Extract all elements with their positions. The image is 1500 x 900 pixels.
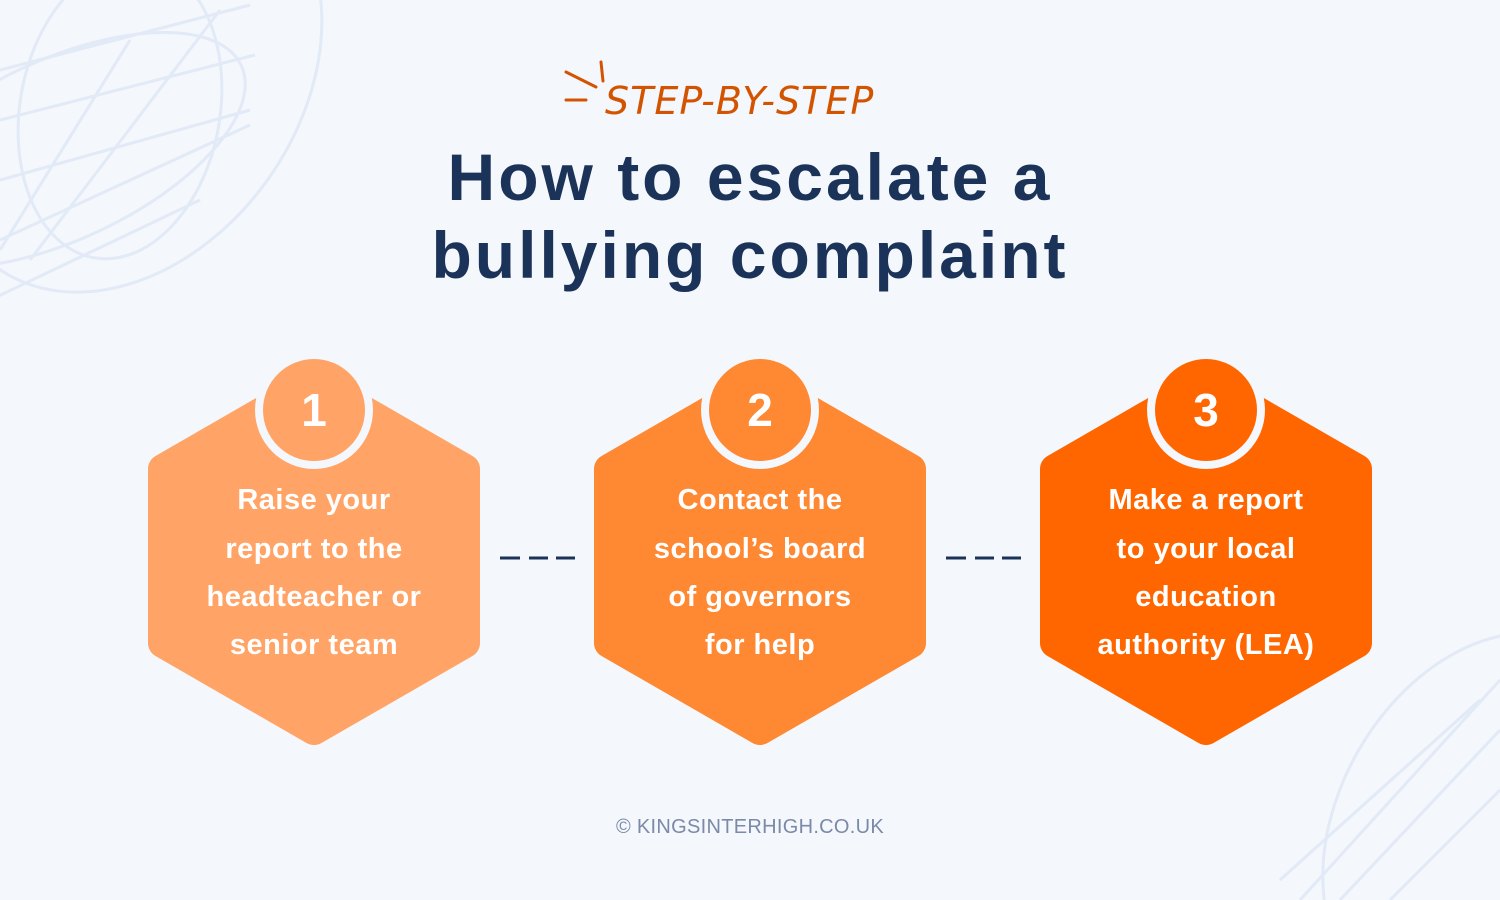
- step 2: Contact the: [678, 484, 842, 516]
- step 3: 3: [1193, 384, 1219, 436]
- step 2: for help: [705, 629, 815, 661]
- step 3: authority (LEA): [1098, 629, 1314, 661]
- footer credit: © KINGSINTERHIGH.CO.UK: [616, 816, 884, 838]
- title: bullying complaint: [431, 218, 1068, 292]
- step 3: to your local: [1117, 533, 1295, 565]
- step 1: headteacher or: [207, 581, 421, 613]
- title: [431, 140, 1068, 292]
- step 3: [1055, 351, 1357, 730]
- step 1: 1: [301, 384, 327, 436]
- step 1: [163, 351, 465, 730]
- step 2: school’s board: [654, 533, 866, 565]
- step 3: Make a report: [1108, 484, 1304, 516]
- step 2: 2: [747, 384, 773, 436]
- subtitle: step-by-step: STEP-BY-STEP: [605, 79, 874, 123]
- step 2: [609, 351, 911, 730]
- step 1: Raise your: [237, 484, 391, 516]
- connector 2: [946, 556, 1021, 560]
- subtitle: step-by-step: [564, 60, 874, 123]
- step 1: report to the: [225, 533, 403, 565]
- step 2: of governors: [668, 581, 852, 613]
- step 1: senior team: [230, 629, 398, 661]
- step 3: education: [1135, 581, 1277, 613]
- title: How to escalate a: [448, 140, 1052, 214]
- connector 1: [500, 556, 575, 560]
